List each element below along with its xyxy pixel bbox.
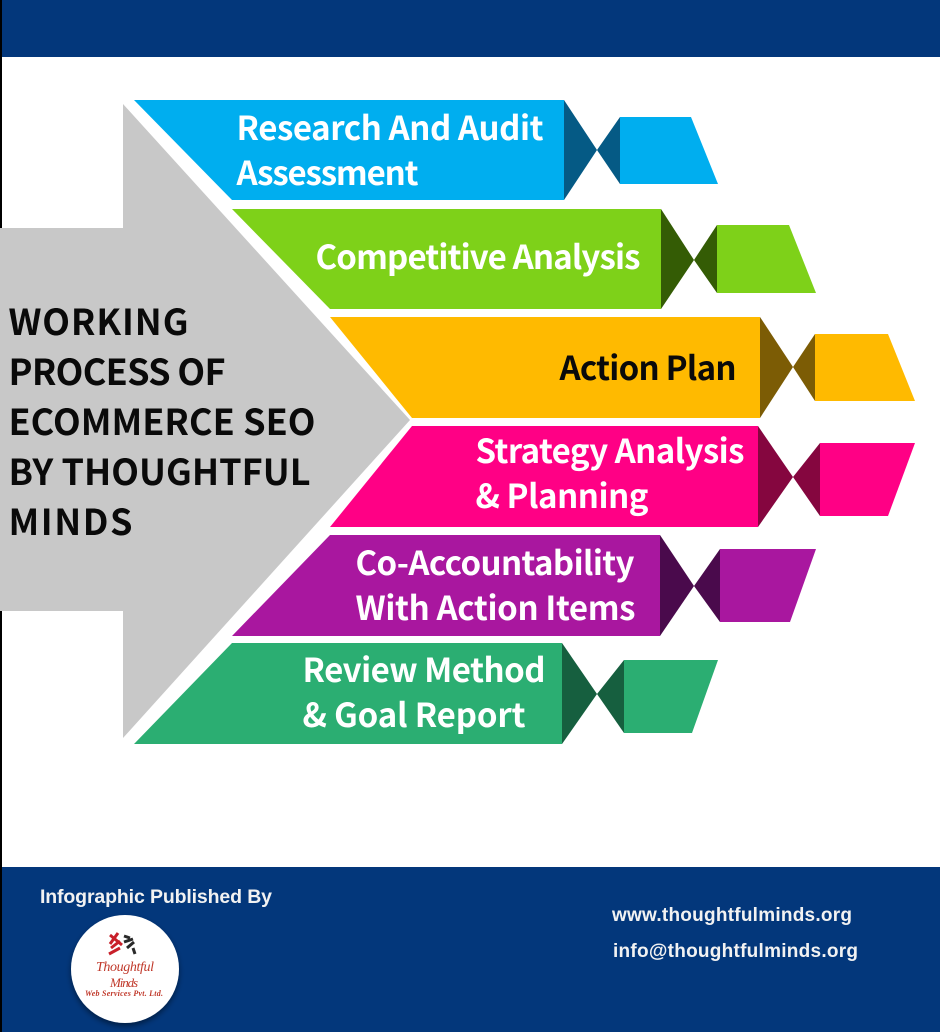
ribbon 1: research and audit assessment: Assessment xyxy=(236,147,419,195)
title: BY THOUGHTFUL xyxy=(8,444,310,496)
logo wordmark: Web Services Pvt. Ltd. xyxy=(85,989,163,998)
logo wordmark: Thoughtful xyxy=(96,960,154,975)
title: ECOMMERCE SEO xyxy=(8,394,316,446)
ribbon 2: competitive analysis xyxy=(232,209,816,309)
publisher logo xyxy=(71,915,179,1023)
grey arrow with title xyxy=(0,104,410,738)
ribbon 1: research and audit assessment: Research And Audit xyxy=(236,102,544,150)
ribbon 5: co-accountability with action items xyxy=(232,535,816,636)
ribbon 4: strategy analysis and planning: & Planning xyxy=(476,470,649,518)
logo wordmark: Minds xyxy=(109,975,138,990)
ribbon 6: review method and goal report xyxy=(134,643,718,744)
contact details: info@thoughtfulminds.org xyxy=(613,941,858,962)
ribbon 6: review method and goal report: & Goal Report xyxy=(302,689,526,737)
publisher heading: Infographic Published By xyxy=(40,886,272,908)
title: MINDS xyxy=(8,494,132,546)
top banner xyxy=(2,0,940,57)
ribbon 2: competitive analysis: Competitive Analysis xyxy=(316,231,640,279)
ribbon 5: co-accountability with action items: Co-Accountability xyxy=(356,537,635,585)
ribbon 6: review method and goal report: Review Method xyxy=(302,644,546,692)
ribbon 3: action plan xyxy=(330,317,915,418)
title: WORKING xyxy=(8,294,188,346)
icon: logo mark xyxy=(109,933,135,954)
ribbon 5: co-accountability with action items: With Action Items xyxy=(356,582,636,630)
ribbon 4: strategy analysis and planning: Strategy Analysis xyxy=(476,425,744,473)
ribbon 3: action plan: Action Plan xyxy=(558,342,736,390)
footer band xyxy=(2,867,940,1032)
ribbon 1: research and audit assessment xyxy=(134,100,718,200)
title: PROCESS OF xyxy=(8,344,226,396)
contact details: www.thoughtfulminds.org xyxy=(611,905,852,926)
ribbon 4: strategy analysis and planning xyxy=(330,425,915,527)
